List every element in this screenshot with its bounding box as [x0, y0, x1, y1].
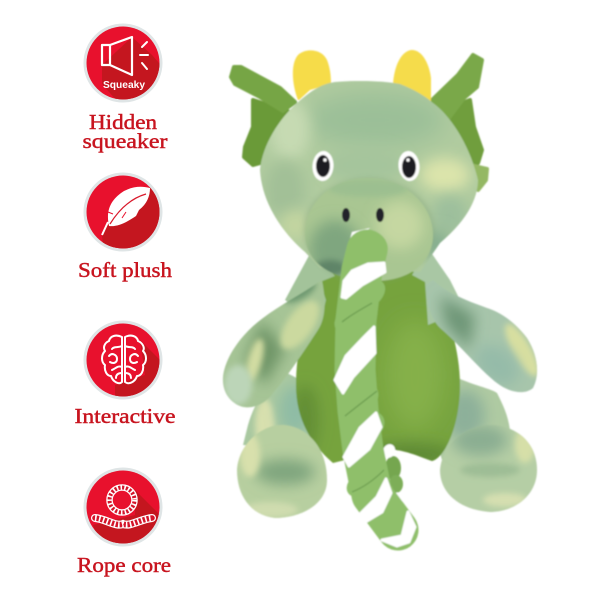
heading: soft plush: Soft plush: [78, 258, 173, 282]
foot: right: [438, 420, 538, 515]
arm: left: [222, 280, 326, 408]
ear: left: [231, 67, 295, 165]
rope toy: [329, 225, 415, 546]
heading: rope core: Rope core: [77, 553, 171, 577]
snout: [304, 178, 434, 282]
leg: right: [440, 378, 510, 460]
leg: left: [242, 373, 310, 446]
icon: rope badge: [84, 468, 162, 546]
heading: interactive: Interactive: [74, 404, 176, 428]
eye: right: [397, 150, 421, 182]
shoulder: right: [412, 248, 465, 325]
belly: [295, 270, 461, 464]
horn: right: [393, 50, 431, 103]
horn: left: [293, 50, 331, 100]
heading: hidden squeaker: [82, 110, 168, 153]
shoulder: left: [285, 250, 335, 325]
ear: right: [429, 55, 487, 190]
head: [260, 81, 478, 272]
icon: squeaker badge: [84, 24, 162, 102]
nostrils: [342, 208, 384, 222]
plush dragon toy: [220, 50, 545, 546]
icon: brain badge: [84, 320, 162, 400]
panel: feature icons: [74, 24, 176, 577]
heading: hidden squeaker: squeaker: [82, 129, 168, 153]
icon: squeaker badge: Squeaky: [103, 80, 145, 91]
arm: right: [434, 292, 538, 393]
rope tail strand: [381, 442, 404, 505]
heading: hidden squeaker: Hidden: [89, 110, 158, 134]
eye: left: [311, 150, 335, 182]
foot: left: [235, 420, 330, 520]
icon: feather badge: [84, 172, 162, 252]
